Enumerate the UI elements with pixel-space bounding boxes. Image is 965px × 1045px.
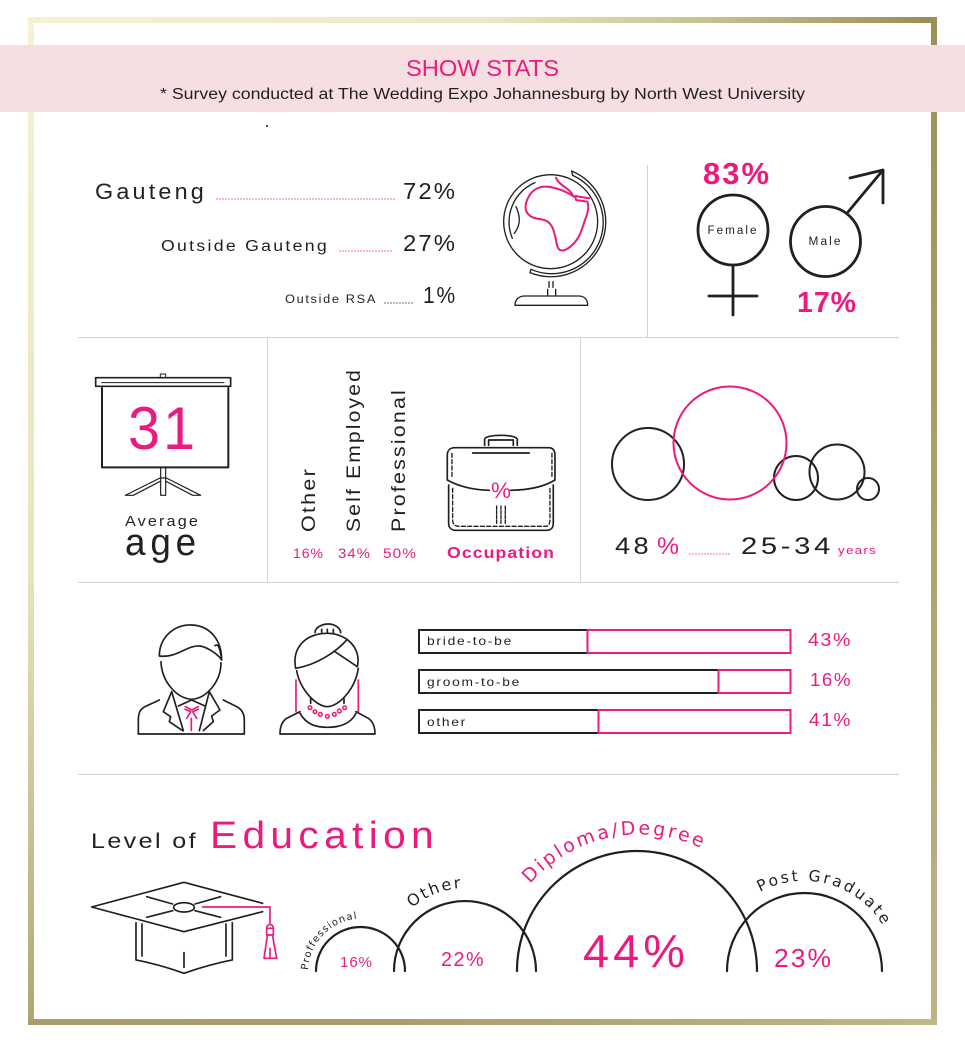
panel: occupation [293, 368, 555, 562]
icon: female symbol [698, 195, 768, 315]
average label: Average [125, 513, 200, 530]
value: 22%: 22% [441, 949, 485, 971]
age range text: 25-34 [741, 533, 834, 560]
icon: briefcase [447, 435, 555, 530]
education heading: Education [210, 815, 439, 857]
bar: bride-to-be [419, 629, 852, 654]
education heading: Level of [91, 830, 198, 853]
education heading [91, 815, 439, 857]
panel: age range [612, 386, 879, 560]
bar: other: 41% [809, 710, 852, 730]
bubble chart [612, 386, 879, 500]
age range text: 48 [615, 533, 652, 560]
occupation percentages: 50% [383, 545, 417, 561]
panel: gender [698, 156, 883, 319]
panel: education [90, 815, 888, 977]
survey note: * Survey conducted at The Wedding Expo Johannesburg by North West University [160, 86, 805, 103]
icon: groom [138, 625, 244, 734]
panel: location stats [95, 178, 457, 308]
age number: 31 [128, 395, 198, 462]
rotated label: Self Employed: Self Employed [343, 368, 365, 532]
male percent: 17% [797, 287, 857, 319]
age range text: % [657, 533, 679, 560]
Gauteng row: 72% [403, 178, 457, 204]
Outside Gauteng row: Outside Gauteng [161, 238, 329, 255]
Gauteng row [95, 178, 457, 204]
bar: bride-to-be: 43% [808, 630, 852, 650]
value: 23%: 23% [774, 943, 833, 973]
Outside RSA row [285, 282, 457, 308]
age range text [615, 533, 877, 560]
arc label: Diploma/Degree: Diploma/Degree [521, 821, 703, 882]
arc label: Post Graduate: Post Graduate [756, 870, 888, 924]
Gauteng row: Gauteng [95, 179, 207, 204]
Outside RSA row: Outside RSA [285, 294, 377, 306]
occupation title: Occupation [447, 545, 555, 562]
rotated label: Professional: Professional [388, 388, 410, 532]
arc chart [316, 851, 882, 971]
value: 16%: 16% [340, 954, 373, 971]
header banner [0, 45, 965, 112]
panel: average age [96, 374, 231, 564]
title: SHOW STATS [406, 55, 559, 81]
age label: age [125, 522, 201, 564]
bar: groom-to-be [419, 669, 852, 694]
Outside Gauteng row [161, 230, 457, 256]
icon: male symbol [790, 170, 883, 276]
occupation percentages: 34% [338, 545, 371, 561]
occupation percentages [293, 545, 417, 561]
bar: groom-to-be: groom-to-be [427, 675, 521, 689]
female percent: 83% [703, 156, 771, 191]
icon: globe [504, 171, 606, 305]
value: 44%: 44% [583, 925, 689, 977]
bar: groom-to-be: 16% [810, 670, 852, 690]
occupation percentages: 16% [293, 545, 324, 561]
icon: male symbol: Male [808, 236, 842, 248]
arc label: Other: Other [408, 879, 460, 906]
icon: graduation cap [92, 882, 277, 973]
Outside RSA row: 1% [423, 282, 457, 308]
bar: other [419, 709, 852, 734]
age range text: years [838, 545, 877, 557]
icon: bride [280, 624, 375, 734]
icon: projector screen [96, 374, 231, 495]
Outside Gauteng row: 27% [403, 230, 457, 256]
icon: female symbol: Female [708, 225, 758, 237]
rotated label: Other: Other [298, 467, 320, 532]
panel: attendees [138, 624, 852, 734]
arc label: Proffessional: Proffessional [300, 911, 356, 970]
briefcase percent: % [491, 478, 511, 503]
bar: other: other [427, 715, 467, 729]
bar: bride-to-be: bride-to-be [427, 634, 513, 648]
